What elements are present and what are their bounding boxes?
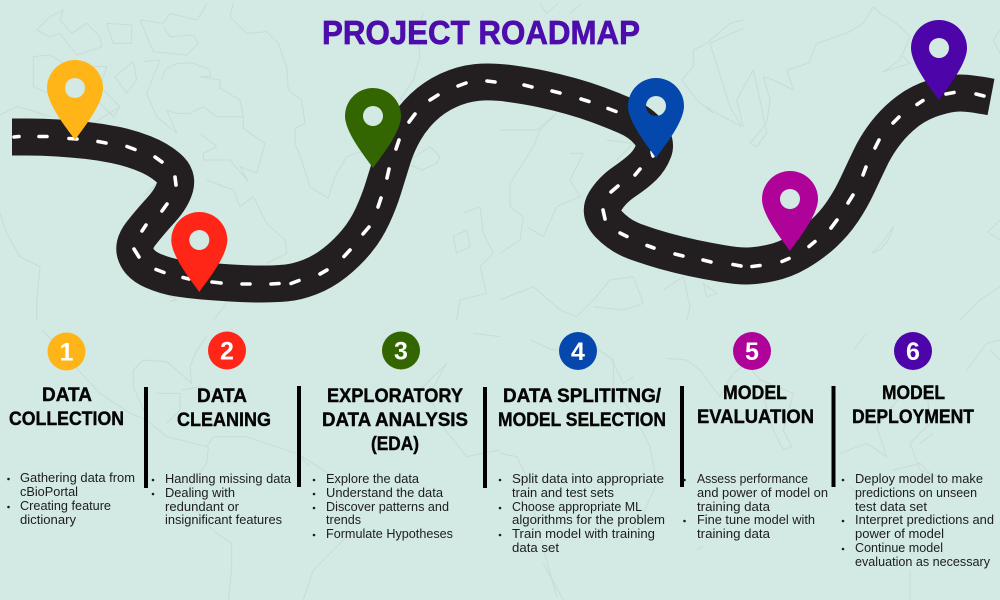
heading: model deployment (852, 383, 974, 428)
number badge 2 (208, 332, 246, 370)
winding road (12, 81, 991, 284)
number badge 4 (559, 332, 597, 370)
heading: model evaluation: MODEL (723, 383, 787, 404)
number badge 1 (48, 332, 86, 370)
bullet list: exploratory data analysis: Explore the data (326, 471, 420, 486)
road centre dashes (14, 81, 984, 284)
number badge 3 (382, 332, 420, 370)
bullet list: exploratory data analysis (313, 471, 453, 541)
pin: blue (628, 78, 684, 158)
bullet list: model evaluation: and power of model on (697, 485, 828, 500)
bullet list: model deployment: predictions on unseen (855, 485, 977, 500)
panel: step 6 model deployment (842, 332, 994, 569)
bullet list: data splitting and model selection: Choose appropriate ML (512, 499, 642, 514)
heading: exploratory data analysis: (EDA) (371, 434, 419, 455)
heading: exploratory data analysis: DATA ANALYSIS (322, 410, 468, 431)
bullet list: data splitting and model selection: train and test sets (512, 485, 614, 500)
heading: data cleaning: CLEANING (177, 410, 271, 431)
bullet list: data collection: dictionary (20, 512, 76, 527)
bullet list: data cleaning: Dealing with (165, 485, 235, 500)
number badge 5 (733, 332, 771, 370)
divider 2 (297, 386, 301, 487)
number badge 2: 2 (220, 338, 234, 366)
pin: yellow (47, 60, 103, 140)
bullet list: data splitting and model selection (499, 471, 665, 555)
bullet list: model evaluation: training data (697, 526, 771, 541)
heading: model deployment: DEPLOYMENT (852, 407, 974, 428)
bullet list: model deployment: power of model (855, 526, 944, 541)
bullet list: model evaluation: Assess performance (697, 471, 808, 486)
bullet list: model deployment: evaluation as necessary (855, 554, 990, 569)
number badge 4: 4 (571, 338, 585, 366)
bullet list: data cleaning: redundant or (165, 499, 240, 514)
panel: step 1 data collection (7, 332, 135, 527)
heading: exploratory data analysis (322, 386, 468, 455)
heading: model evaluation (697, 383, 814, 428)
title: PROJECT ROADMAP (322, 15, 640, 52)
pin: red (171, 212, 227, 292)
bullet list: model deployment: Interpret predictions and (855, 512, 994, 527)
heading: data splitting and model selection (498, 386, 666, 431)
bullet list: data collection (7, 470, 135, 527)
bullet list: data cleaning: Handling missing data (165, 471, 292, 486)
heading: data cleaning (177, 386, 271, 431)
bullet list: data collection: Gathering data from (20, 470, 135, 485)
bullet list: model evaluation: training data (697, 499, 771, 514)
bullet list: data splitting and model selection: Split data into appropriate (512, 471, 664, 486)
heading: data cleaning: DATA (197, 386, 247, 407)
bullet list: exploratory data analysis: trends (326, 512, 361, 527)
bullet list: model deployment: Deploy model to make (855, 471, 983, 486)
panel: step 2 data cleaning (152, 332, 292, 527)
pin: green (345, 88, 401, 168)
heading: model evaluation: EVALUATION (697, 407, 814, 428)
divider 3 (483, 387, 487, 488)
heading: data collection (9, 385, 124, 430)
heading: model deployment: MODEL (882, 383, 945, 404)
heading: data collection: COLLECTION (9, 409, 124, 430)
bullet list: model evaluation: Fine tune model with (697, 512, 815, 527)
panel: step 5 model evaluation (683, 332, 828, 541)
bullet list: exploratory data analysis: Formulate Hypotheses (326, 526, 453, 541)
bullet list: data cleaning (152, 471, 292, 527)
divider 4 (680, 386, 684, 487)
bullet list: data cleaning: insignificant features (165, 512, 282, 527)
bullet list: data splitting and model selection: Train model with training (512, 526, 655, 541)
bullet list: exploratory data analysis: Understand the data (326, 485, 444, 500)
heading: exploratory data analysis: EXPLORATORY (327, 386, 463, 407)
number badge 1: 1 (60, 338, 74, 366)
bullet list: data collection: cBioPortal (20, 484, 78, 499)
bullet list: model deployment: Continue model (855, 540, 943, 555)
bullet list: data splitting and model selection: data set (512, 540, 559, 555)
bullet list: model deployment: test data set (855, 499, 927, 514)
heading: data splitting and model selection: DATA SPLITITNG/ (503, 386, 662, 407)
number badge 6 (894, 332, 932, 370)
divider 1 (144, 387, 148, 488)
bullet list: model deployment (842, 471, 994, 569)
heading: data collection: DATA (42, 385, 92, 406)
number badge 3: 3 (394, 338, 408, 366)
panel: step 4 data splitting and model selection (498, 332, 666, 555)
number badge 6: 6 (906, 338, 920, 366)
pin: magenta (762, 171, 818, 251)
heading: data splitting and model selection: MODEL SELECTION (498, 410, 666, 431)
panel: step 3 exploratory data analysis (313, 332, 468, 541)
divider 5 (832, 386, 836, 487)
pin: purple (911, 20, 967, 100)
world map outline (0, 3, 493, 320)
number badge 5: 5 (745, 338, 759, 366)
bullet list: model evaluation (683, 471, 828, 541)
bullet list: data splitting and model selection: algorithms for the problem (512, 512, 665, 527)
bullet list: data collection: Creating feature (20, 498, 111, 513)
bullet list: exploratory data analysis: Discover patterns and (326, 499, 449, 514)
